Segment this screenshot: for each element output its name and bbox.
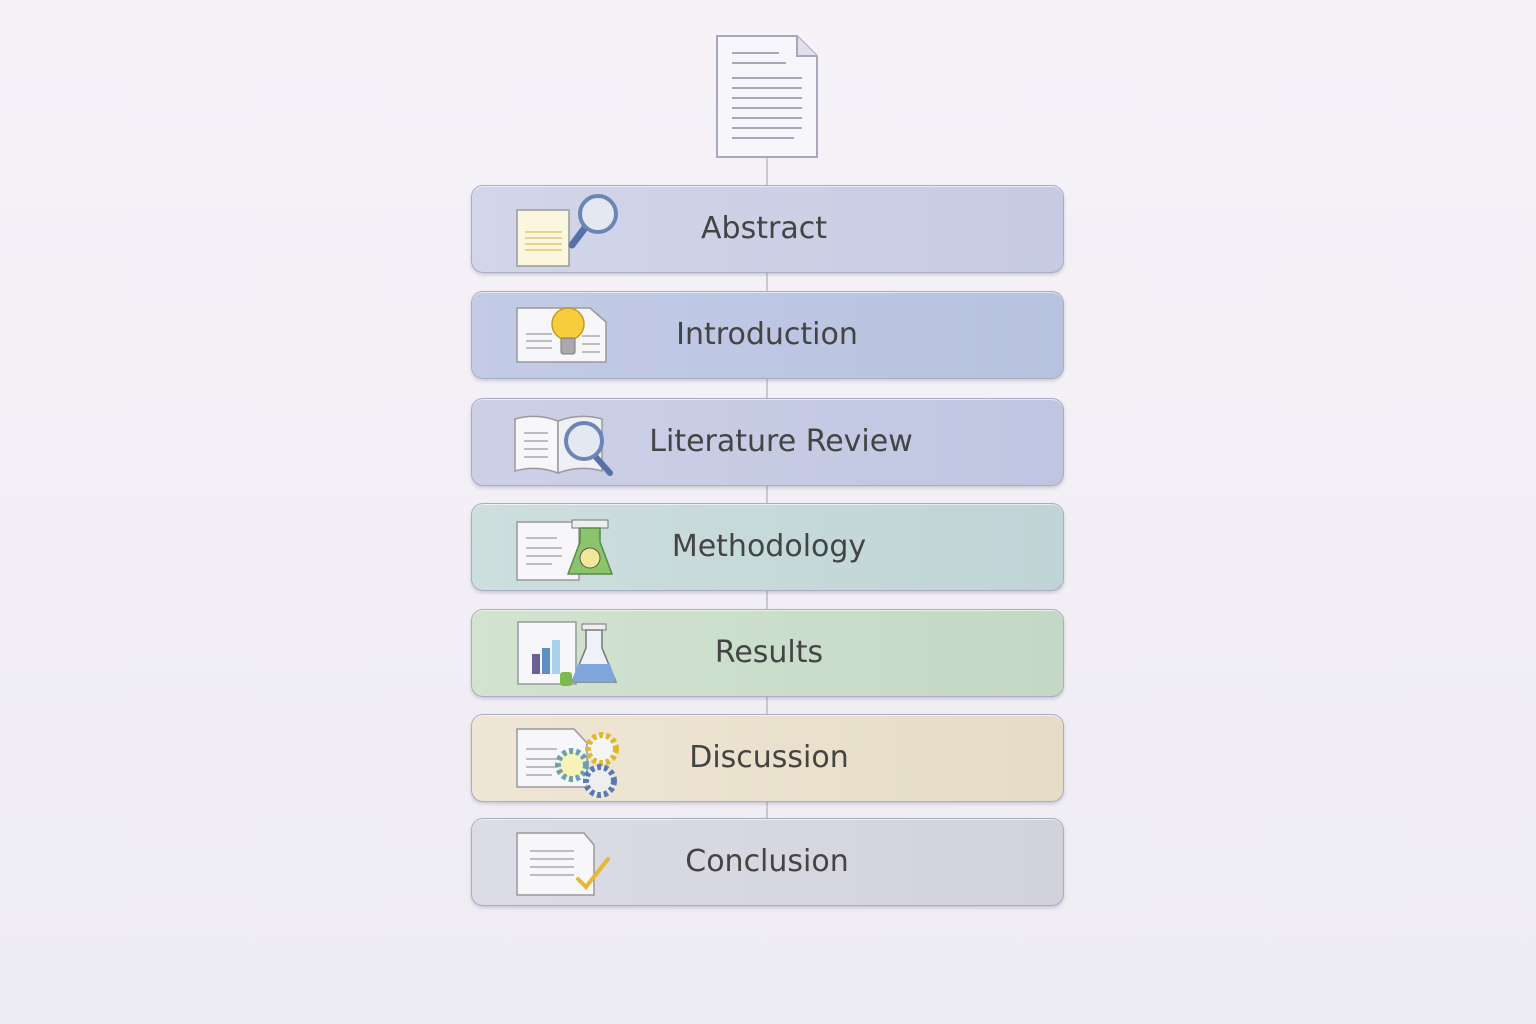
label: Results	[715, 635, 823, 670]
panel: literature review	[471, 398, 1064, 486]
label: Abstract	[701, 211, 827, 246]
icon: chart and flask	[517, 621, 617, 686]
icon: doc with flask	[516, 520, 613, 581]
icon: top document	[716, 35, 818, 158]
connector line	[766, 158, 768, 818]
panel: discussion	[471, 714, 1064, 802]
panel: results	[471, 609, 1064, 697]
panel: conclusion	[471, 818, 1064, 906]
panel: introduction	[471, 291, 1064, 379]
label: Introduction	[676, 317, 858, 352]
label: Literature Review	[649, 424, 913, 459]
panel: methodology	[471, 503, 1064, 591]
label: Discussion	[689, 740, 849, 775]
icon: doc with gears	[516, 728, 619, 798]
label: Conclusion	[685, 844, 849, 879]
icon: document with magnifier	[516, 194, 618, 267]
icon: open book with magnifier	[514, 416, 613, 476]
icon: doc with lightbulb	[516, 307, 607, 363]
icon: doc with check	[516, 832, 610, 896]
label: Methodology	[672, 529, 866, 564]
panel: abstract	[471, 185, 1064, 273]
